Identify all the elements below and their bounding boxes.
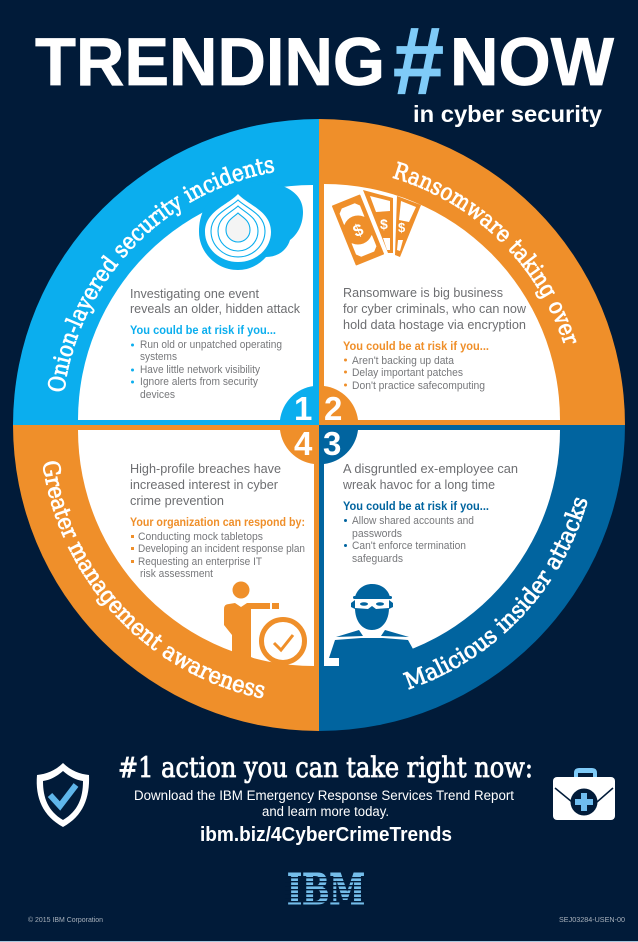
panel 1: onion-layered security incidents <box>13 119 319 425</box>
icon: money bills <box>330 190 421 267</box>
number badges: 2 <box>324 390 342 427</box>
panel 1 text: Have little network visibility <box>140 364 261 376</box>
title <box>35 8 615 115</box>
panel 2 text: Aren't backing up data <box>352 355 454 367</box>
panel 2 text: Don't practice safecomputing <box>352 380 485 392</box>
panel 1 text: You could be at risk if you... <box>130 325 276 337</box>
panel 3 text: wreak havoc for a long time <box>342 477 495 492</box>
panel 2 text: hold data hostage via encryption <box>343 317 526 332</box>
panel 3 text: You could be at risk if you... <box>343 501 489 513</box>
hash symbol: # <box>393 8 444 115</box>
panel 2 text: for cyber criminals, who can now <box>343 301 526 316</box>
curved heading: Greater management awareness <box>42 461 265 698</box>
panel 4 text: High-profile breaches have <box>130 461 281 476</box>
panel 3 text <box>342 461 518 565</box>
panel 3 text: safeguards <box>352 553 403 565</box>
document number: SEJ03284-USEN-00 <box>559 915 625 924</box>
panel 4 text: crime prevention <box>130 493 224 508</box>
panel 1 text: Run old or unpatched operating <box>140 339 282 351</box>
panel 1 text <box>130 286 300 401</box>
panel 2 text: You could be at risk if you... <box>343 341 489 353</box>
icon: person pointing at clock <box>224 582 304 670</box>
copyright: © 2015 IBM Corporation <box>28 915 103 924</box>
number badges: 4 <box>294 425 313 462</box>
icon: first aid kit <box>553 768 615 820</box>
panel 4 text: Developing an incident response plan <box>138 543 305 555</box>
title: NOW <box>450 24 615 100</box>
panel 1 text: reveals an older, hidden attack <box>130 301 300 316</box>
panel 2 text: Delay important patches <box>352 367 463 379</box>
call to action text: Download the IBM Emergency Response Services Trend Report <box>134 788 514 803</box>
panel 4 text: Requesting an enterprise IT <box>138 556 262 568</box>
icon: money bills: $ <box>398 220 406 235</box>
panel 1 text: Investigating one event <box>130 286 259 301</box>
call to action text: and learn more today. <box>262 804 389 819</box>
title: TRENDING <box>35 24 385 100</box>
icon: onion drop <box>199 178 303 270</box>
curved heading: Ransomware taking over <box>392 161 576 344</box>
panel 2 text <box>343 285 526 392</box>
panel 4 text: Conducting mock tabletops <box>138 531 263 543</box>
number badges: 3 <box>323 425 341 462</box>
icon: money bills: $ <box>380 216 388 232</box>
panel 3 text: Allow shared accounts and <box>352 515 474 527</box>
call to action heading: #1 action you can take right now: <box>118 751 533 784</box>
panel 3 text: passwords <box>352 528 402 540</box>
panel 1 text: devices <box>140 389 175 401</box>
curved heading: Onion-layered security incidents <box>48 158 274 392</box>
panel 4 text <box>130 461 305 580</box>
call to action text <box>134 788 514 819</box>
number badges: 1 <box>294 390 312 427</box>
panel 2 text: Ransomware is big business <box>343 285 503 300</box>
icon: shield with check <box>37 763 89 827</box>
number badges <box>280 386 358 464</box>
icon: money bills: $ <box>350 220 367 241</box>
panel 4 text: increased interest in cyber <box>130 477 279 492</box>
subtitle: in cyber security <box>413 101 602 127</box>
IBM logo: IBM <box>287 865 365 914</box>
panel 4: greater management awareness <box>13 425 319 731</box>
icon: masked insider <box>324 584 413 670</box>
panel 3 text: A disgruntled ex-employee can <box>343 461 518 476</box>
panel 4 text: risk assessment <box>140 568 213 580</box>
panel 3 text: Can't enforce termination <box>352 540 466 552</box>
link: ibm.biz/4CyberCrimeTrends <box>200 824 452 846</box>
curved heading: Malicious insider attacks <box>402 498 588 690</box>
panel 3: malicious insider attacks <box>319 425 625 731</box>
panel 1 text: systems <box>140 351 177 363</box>
panel 4 text: Your organization can respond by: <box>130 517 305 529</box>
panel 1 text: Ignore alerts from security <box>140 376 259 388</box>
panel 2: ransomware taking over <box>319 119 625 425</box>
